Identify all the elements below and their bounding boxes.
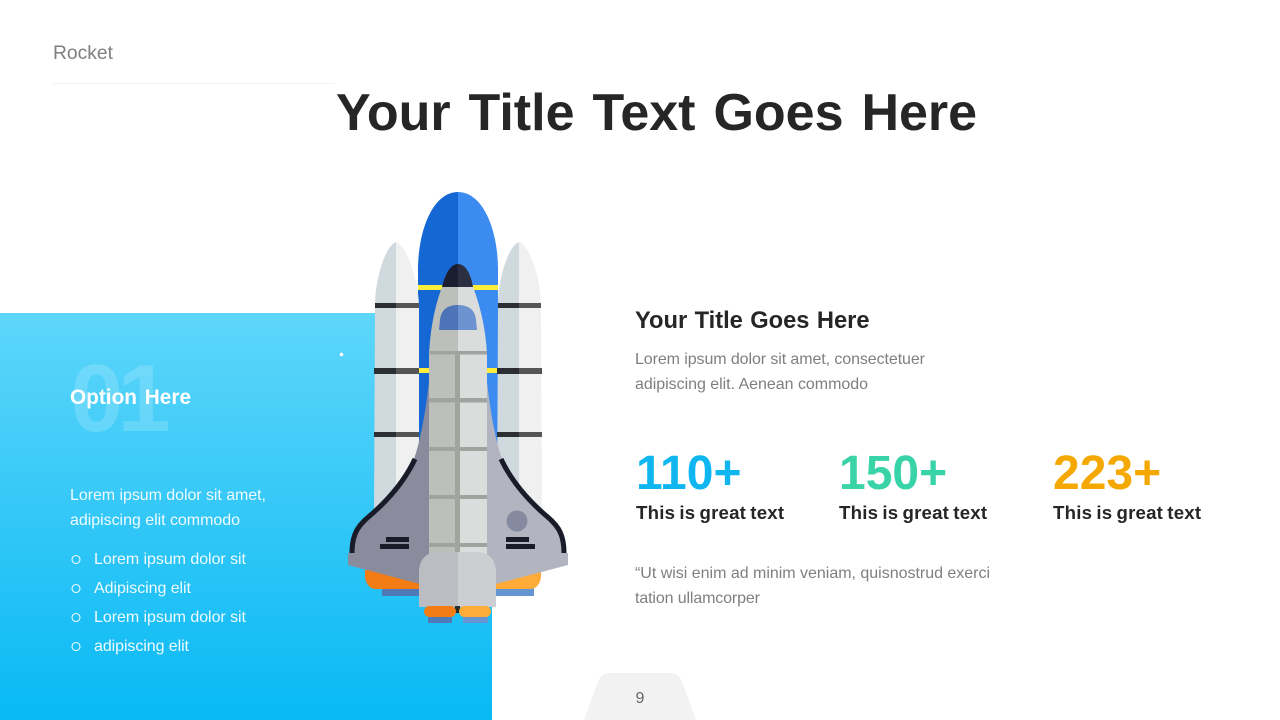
blue side panel	[0, 313, 492, 720]
quote text	[635, 565, 990, 607]
option heading: Option Here	[70, 386, 191, 409]
bullet list: adipiscing elit	[94, 638, 190, 655]
stat: 223+: This is great text	[1053, 502, 1201, 523]
stat: 150+	[839, 447, 987, 523]
engine nozzles	[424, 606, 491, 623]
main fuel tank	[418, 192, 498, 510]
panel text: option 01	[70, 345, 266, 655]
stat: 150+: This is great text	[839, 502, 987, 523]
page number tab	[584, 673, 696, 720]
wing vents and porthole	[380, 510, 535, 549]
bullet list: Adipiscing elit	[94, 580, 192, 597]
icon: space shuttle rocket	[348, 192, 568, 623]
heading: your title goes here: Your Title Goes Here	[635, 308, 870, 334]
quote text: tation ullamcorper	[635, 590, 761, 607]
left booster	[374, 242, 419, 520]
stat: 223+: 223+	[1053, 447, 1161, 500]
cockpit window	[439, 305, 458, 330]
bullet list	[72, 551, 247, 655]
stat: 110+: This is great text	[636, 502, 784, 523]
stat: 223+	[1053, 447, 1201, 523]
body text: adipiscing elit. Aenean commodo	[635, 376, 868, 393]
stat: 150+: 150+	[839, 447, 947, 500]
body panel lines	[429, 351, 487, 556]
body text	[635, 351, 926, 393]
engine block	[419, 552, 496, 607]
title: Your Title Text Goes Here	[336, 84, 977, 142]
left wing	[348, 360, 458, 594]
bullet list: Lorem ipsum dolor sit	[94, 609, 247, 626]
large faded number 01: 01	[70, 345, 168, 452]
right wing	[458, 360, 568, 594]
quote text: “Ut wisi enim ad minim veniam, quisnostrud exerci	[635, 565, 990, 582]
orbiter fuselage	[429, 264, 487, 560]
option description	[70, 487, 266, 529]
wing edge strokes	[352, 459, 564, 553]
option description: adipiscing elit commodo	[70, 512, 240, 529]
section label: Rocket: Rocket	[53, 43, 114, 64]
nose cap	[442, 264, 458, 287]
option description: Lorem ipsum dolor sit amet,	[70, 487, 266, 504]
rear thruster glow	[365, 570, 541, 596]
bullet list: Lorem ipsum dolor sit	[94, 551, 247, 568]
stat: 110+	[636, 447, 784, 523]
body text: Lorem ipsum dolor sit amet, consectetuer	[635, 351, 926, 368]
page number tab: 9	[636, 690, 645, 707]
right booster	[497, 242, 542, 520]
stat: 110+: 110+	[636, 447, 741, 500]
small white dot	[340, 353, 343, 356]
